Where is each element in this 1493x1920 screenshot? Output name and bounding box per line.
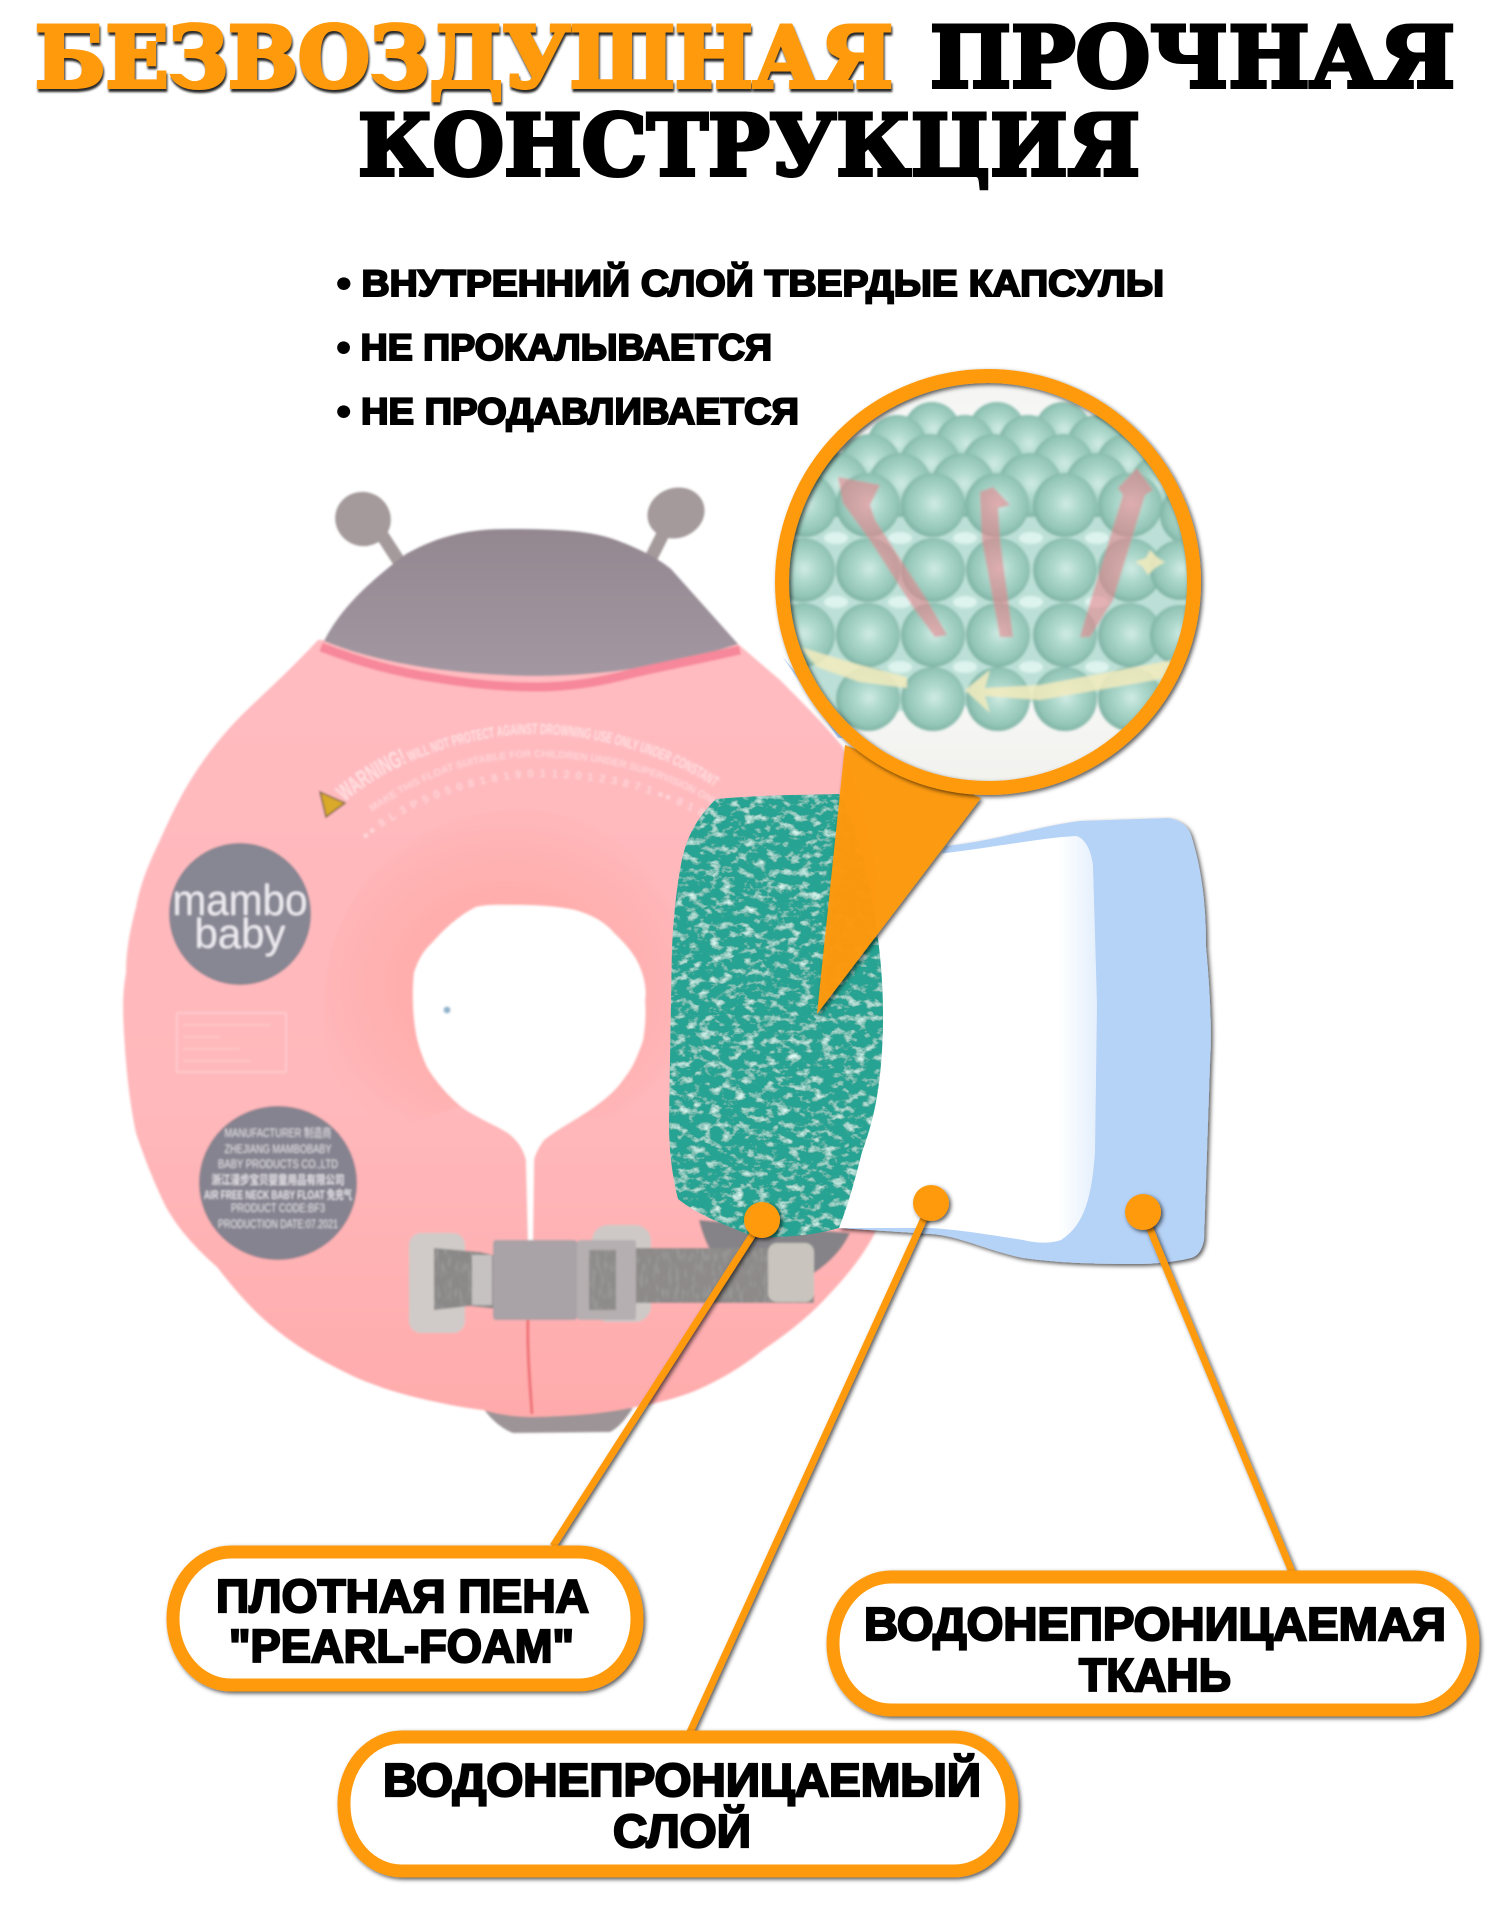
print box — [177, 1013, 286, 1072]
pink body — [123, 640, 890, 1417]
callout text line 2: СЛОЙ — [613, 1805, 751, 1857]
title: black word: ПРОЧНАЯ — [930, 8, 1455, 107]
stray dot in opening — [444, 1006, 450, 1014]
magnifier pointer — [817, 745, 981, 1014]
teal pearl foam — [669, 794, 883, 1237]
warning triangle — [320, 792, 345, 817]
callout: waterproof fabric — [833, 1577, 1473, 1710]
callout: waterproof layer — [344, 1737, 1012, 1871]
leader line: waterproof layer — [690, 1203, 931, 1732]
leader line: foam — [553, 1220, 762, 1546]
pink flow arrows — [838, 468, 1153, 637]
grey head — [324, 529, 738, 676]
yellow flow arrows — [800, 550, 1173, 713]
dot: layer — [913, 1185, 949, 1221]
antennae — [326, 480, 712, 568]
badge: manufacturer info: ZHEJIANG MAMBOBABY — [224, 1142, 332, 1156]
badge: manufacturer info: 浙江漫步宝贝婴童用品有限公司 — [212, 1172, 344, 1187]
title: second line: КОНСТРУКЦИЯ — [358, 96, 1140, 195]
front seam — [528, 1318, 532, 1414]
buckle and strap — [409, 1225, 814, 1333]
badge: manufacturer info: MANUFACTURER 制造商 — [224, 1125, 332, 1140]
warning print: ●● 8 L 3 P 5 0 5 0 8 1 8 1 9 0 1 1 2 0 1 2 3 8 7 1 ●● 8 1 8 7 — [363, 770, 705, 838]
callout text line 1: ПЛОТНАЯ ПЕНА — [216, 1570, 589, 1622]
blue sliver behind lens — [782, 656, 850, 738]
capsule rows — [794, 400, 1182, 542]
badge: manufacturer info: AIR FREE NECK BABY FLOAT 免充气 — [204, 1187, 352, 1202]
dot: fabric — [1125, 1194, 1161, 1230]
callout text line 2: ТКАНЬ — [1079, 1649, 1231, 1701]
product: ladybug neck float — [122, 486, 876, 1434]
callout text line 2: "PEARL-FOAM" — [229, 1620, 574, 1672]
callout text line 1: ВОДОНЕПРОНИЦАЕМАЯ — [864, 1598, 1446, 1650]
callout: pearl foam — [173, 1552, 637, 1685]
badge: mambo baby logo: baby — [194, 910, 286, 957]
dark holder behind foam — [699, 1220, 850, 1273]
magnifier ring — [782, 376, 1194, 788]
white waterproof layer — [839, 836, 1097, 1243]
filler between capsules — [790, 516, 1186, 715]
leader line: fabric — [1143, 1212, 1292, 1572]
neck opening — [413, 905, 646, 1240]
blue waterproof fabric — [839, 818, 1211, 1264]
callout text line 1: ВОДОНЕПРОНИЦАЕМЫЙ — [383, 1754, 981, 1806]
bullet 1: • ВНУТРЕННИЙ СЛОЙ ТВЕРДЫЕ КАПСУЛЫ — [337, 262, 1164, 304]
stitched seam — [321, 647, 740, 687]
dot: foam — [744, 1202, 780, 1238]
bullet 2: • НЕ ПРОКАЛЫВАЕТСЯ — [337, 327, 772, 368]
badge: mambo baby logo: mambo — [172, 876, 308, 925]
badge: manufacturer info: PRODUCTION DATE:07.2021 — [218, 1217, 338, 1231]
bullet list — [337, 262, 1164, 432]
warning print: MAKE THIS FLOAT SUITABLE FOR CHILDREN UNDER SUPERVISION ONLY — [369, 750, 715, 811]
tab under float — [483, 1408, 633, 1433]
warning print: WARNING! WILL NOT PROTECT AGAINST DROWNING USE ONLY UNDER CONSTANT — [334, 722, 720, 800]
badge: mambo baby logo — [169, 843, 311, 985]
inner collar — [323, 810, 690, 1127]
magnifier: inner capsules close-up — [771, 376, 1220, 788]
badge: manufacturer info: BABY PRODUCTS CO.,LTD — [218, 1157, 338, 1171]
title — [35, 8, 1455, 195]
light gaps between rows — [824, 532, 1109, 673]
cross-section: layered cushion — [669, 794, 1211, 1264]
leader lines — [553, 1203, 1292, 1732]
bullet 3: • НЕ ПРОДАВЛИВАЕТСЯ — [337, 391, 799, 432]
anchor dots — [744, 1185, 1161, 1238]
badge: manufacturer info: PRODUCT CODE:BF3 — [231, 1201, 325, 1215]
badge: manufacturer info — [199, 1106, 357, 1260]
title: orange word: БЕЗВОЗДУШНАЯ — [35, 8, 893, 107]
